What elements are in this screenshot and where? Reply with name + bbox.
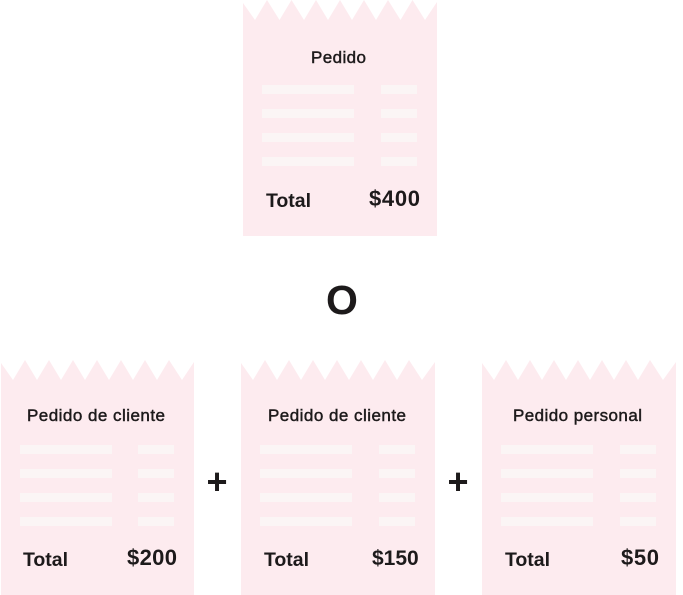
total label: Total	[266, 190, 311, 212]
line items	[20, 445, 174, 526]
receipt: Pedido personal $50	[482, 360, 676, 595]
receipt paper	[482, 360, 676, 595]
total amount: $150	[372, 547, 419, 570]
line items	[262, 85, 417, 166]
receipt: Pedido de cliente $200	[1, 360, 194, 595]
total label: Total	[264, 549, 309, 571]
total label: Total	[23, 549, 68, 571]
heading: Pedido de cliente	[268, 406, 406, 425]
total label: Total	[505, 549, 550, 571]
receipt: Pedido $400	[243, 0, 437, 236]
separator letter O: O	[326, 277, 358, 323]
heading: Pedido personal	[513, 406, 642, 425]
line items	[501, 445, 656, 526]
receipt paper	[1, 360, 194, 595]
receipt: Pedido de cliente $150	[241, 360, 435, 595]
line items	[260, 445, 415, 526]
total amount: $50	[621, 545, 659, 570]
total amount: $200	[127, 545, 177, 570]
plus sign: +	[447, 461, 469, 502]
receipt paper	[241, 360, 435, 595]
plus sign: +	[206, 461, 228, 502]
receipt paper	[243, 0, 437, 236]
heading: Pedido de cliente	[27, 406, 165, 425]
total amount: $400	[369, 186, 420, 211]
heading: Pedido	[311, 48, 366, 67]
